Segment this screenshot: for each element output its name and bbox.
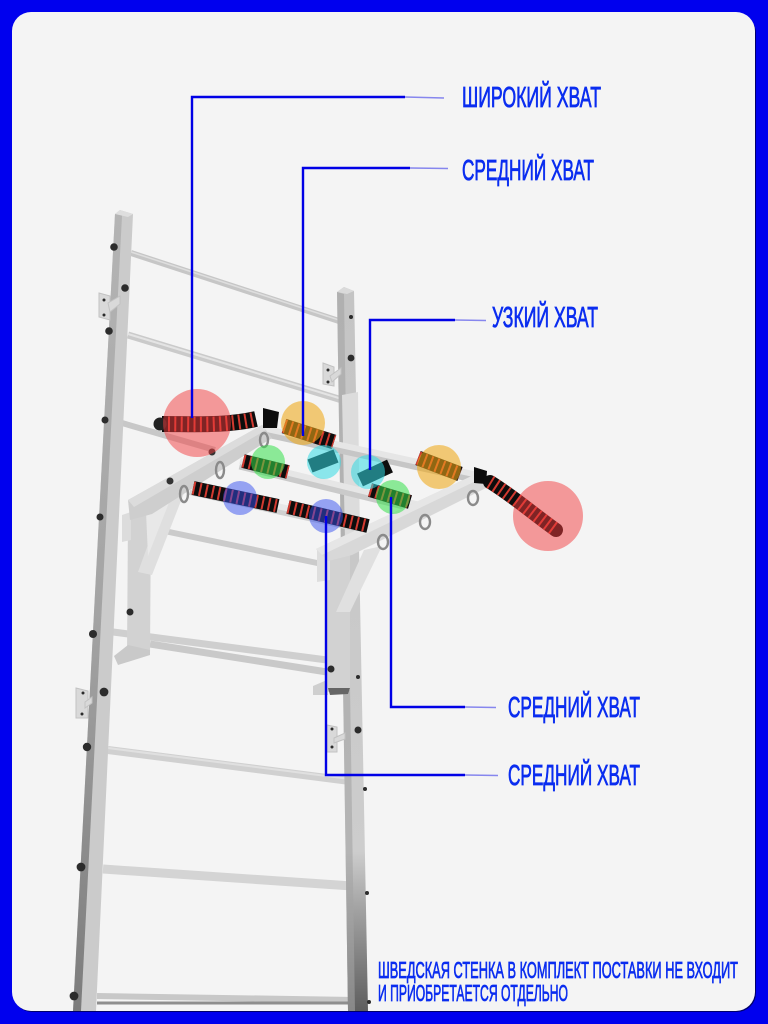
pull-up bar frame bbox=[114, 408, 488, 695]
black end caps bbox=[263, 408, 487, 484]
left post and foot bbox=[114, 488, 186, 665]
grip highlight circles bbox=[163, 389, 583, 551]
short grips bbox=[193, 426, 460, 526]
label: medium grip lower two: СРЕДНИЙ ХВАТ bbox=[508, 758, 640, 792]
carabiner rings bbox=[180, 433, 478, 549]
label: medium grip top: СРЕДНИЙ ХВАТ bbox=[462, 153, 594, 187]
label: narrow grip: УЗКИЙ ХВАТ bbox=[492, 300, 598, 334]
cross tubes bbox=[190, 428, 478, 529]
label: medium grip lower one: СРЕДНИЙ ХВАТ bbox=[508, 690, 640, 724]
right post and foot bbox=[313, 545, 382, 695]
label: wide grip: ШИРОКИЙ ХВАТ bbox=[462, 80, 601, 114]
diagonal arms bbox=[128, 425, 488, 561]
left rail bbox=[73, 210, 133, 1011]
wide left grip bbox=[154, 418, 256, 430]
rungs bbox=[97, 252, 355, 1003]
callout lines bbox=[192, 97, 498, 776]
footnote bbox=[378, 957, 738, 1006]
wall brackets bbox=[76, 293, 345, 752]
grips bbox=[154, 418, 556, 530]
arm bolts bbox=[166, 448, 216, 484]
wide right grip bbox=[490, 482, 556, 530]
rail bolts bbox=[70, 243, 371, 1004]
right rail bbox=[337, 287, 368, 1011]
footnote: И ПРИОБРЕТАЕТСЯ ОТДЕЛЬНО bbox=[378, 980, 568, 1006]
wall bars ladder bbox=[70, 210, 371, 1011]
